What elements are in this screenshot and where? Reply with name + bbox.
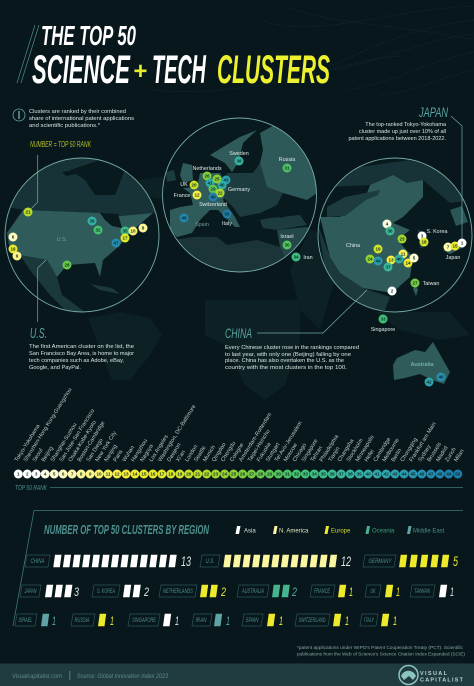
rotated cluster names: Stuttgart [265,442,282,463]
rotated cluster names: Seoul [32,448,44,463]
rotated cluster names: Fukuoka [256,441,273,463]
row 2: Japan to Taiwan: 1 [349,585,353,599]
row 1: China, U.S., Germany [25,553,458,569]
rank strip 1 to 50: 45 [410,472,416,477]
row 2: Japan to Taiwan: NETHERLANDS [163,589,193,595]
markers: north america: 17 [122,236,128,241]
row 3: Israel to Italy [15,614,397,628]
row 2: Japan to Taiwan [20,585,454,599]
markers and labels: europe: France [174,193,190,199]
callout: Japan: The top-ranked Tokyo-Yokohama [365,122,447,128]
markers and labels: europe: 41 [207,181,213,186]
markers and labels: east asia: Taiwan [423,281,439,287]
callout: China: Every Chinese cluster rose in the rankings compared [225,345,359,351]
rotated cluster names: Philadelphia [319,433,341,463]
rotated cluster names: Boston-Cambridge [77,420,107,463]
markers and labels: east asia: 14 [405,261,411,266]
rotated cluster names: Nagoya [140,443,155,463]
markers: north america: 32 [95,228,101,233]
rotated cluster names: Hangzhou [131,438,149,463]
row 1: China, U.S., Germany: CHINA [30,559,44,565]
rotated cluster names: Stockholm [346,437,365,463]
rank strip 1 to 50: 7 [71,472,74,477]
markers and labels: east asia: China [346,243,360,249]
rank strip 1 to 50: 36 [330,472,335,477]
rotated cluster names: Minneapolis [355,434,376,463]
rank strip 1 to 50: 4 [44,472,47,477]
markers and labels: east asia: S. Korea [427,229,447,235]
markers and labels: east asia: 19 [375,247,381,252]
row 3: Israel to Italy: ITALY [364,618,375,624]
legend: regions: Asia [244,528,256,534]
rotated cluster names: Berlin [391,448,403,463]
rotated cluster names: San Jose-San Francisco [59,408,96,463]
intro note with info icon: share of international patent applications [29,116,134,122]
globe: north america [4,158,160,312]
rank strip 1 to 50: 26 [240,472,246,477]
markers and labels: europe: UK [180,182,188,188]
row 2: Japan to Taiwan: FRANCE [314,589,331,595]
intro note with info icon: Clusters are ranked by their combined [29,109,126,115]
faint surrounding continents [88,176,470,400]
row 2: Japan to Taiwan: 2 [143,585,149,599]
callout: Japan [348,104,449,142]
markers and labels: europe: 50 [224,212,230,217]
markers and labels: europe: 25 [214,177,220,182]
rank strip 1 to 50: 47 [428,472,434,477]
rotated cluster names: Tianjin [328,446,342,463]
markers and labels: europe: 30 [284,243,290,248]
footnote: *patent applications under WIPO's Patent Cooperation Treaty (PCT). Scientific [297,645,464,650]
markers and labels: east asia: 18 [421,240,427,245]
row 3: Israel to Italy: 1 [279,614,283,628]
callout: China: CHINA [225,325,252,341]
rank strip 1 to 50: 43 [392,472,398,477]
rotated cluster names: Melbourne [382,437,401,463]
row 3: Israel to Italy: 1 [110,614,114,628]
logo: Visual Capitalist: CAPITALIST [420,678,464,684]
footnote [297,645,466,656]
markers and labels: east asia: Australia [410,362,435,368]
axis label: top 50 rank: TOP 50 RANK [15,483,48,492]
markers and labels: europe: 34 [293,255,299,260]
legend: regions: Middle East [413,528,445,534]
callout: Japan: patent applications between 2018-2022. [348,136,446,142]
rotated cluster names: Tehran [310,445,324,463]
callout: U.S.: Google, and PayPal. [29,365,81,371]
markers and labels: europe: 40 [219,183,225,188]
row 3: Israel to Italy: ISRAEL [18,618,32,624]
rank strip 1 to 50: 15 [141,472,147,477]
markers and labels: europe: Germany [228,187,250,193]
row 3: Israel to Italy: RUSSIA [74,618,90,624]
footer band: Source: Global Innovation Index 2023 [77,674,169,680]
markers and labels: europe: 49 [210,195,216,200]
markers and labels: east asia: 13 [388,258,394,263]
markers and labels: east asia: 36 [387,229,393,234]
rank strip 1 to 50: 50 [455,472,461,477]
rotated cluster names: Milan [453,449,466,463]
row 3: Israel to Italy: SINGAPORE [132,618,157,624]
rank strip 1 to 50: 23 [213,472,219,477]
markers and labels: east asia: 37 [385,265,391,270]
rotated cluster names: Cologne [229,442,245,463]
rank strip 1 to 50: 32 [294,472,299,477]
rank strip 1 to 50: 19 [177,472,183,477]
rank strip 1 to 50: 29 [267,472,272,477]
markers and labels: east asia: 24 [367,257,373,262]
rotated cluster names: Los Angeles [149,434,170,463]
rotated cluster names: Zurich [444,447,458,463]
rotated cluster names: Wuhan [122,445,136,463]
label: U.S. on map: U.S. [57,237,68,243]
markers and labels: east asia: 11 [401,252,406,257]
legend: regions: N. America [279,528,309,534]
callout: U.S.: U.S. [30,325,47,342]
row 1: China, U.S., Germany: GERMANY [368,559,392,565]
markers and labels: europe: Switzerland [199,202,227,208]
markers: north america: 35 [122,229,128,234]
markers and labels: europe: 20 [191,183,197,188]
row 3: Israel to Italy: 1 [226,614,230,628]
rotated cluster names: Beijing [41,446,55,463]
rotated cluster names: Tokyo-Yokohama [14,423,42,463]
row 2: Japan to Taiwan: UK [370,589,376,595]
markers and labels: europe: 31 [284,166,290,171]
markers and labels: east asia: 15 [452,244,458,249]
rotated cluster names: Tel Aviv-Jerusalem [274,420,304,463]
rank strip 1 to 50: 42 [384,472,389,477]
rotated cluster names: Shanghai-Suzhou [50,422,78,463]
markers and labels: east asia: 42 [426,380,432,385]
rotated cluster names: Paris [113,449,125,463]
title: + [133,58,147,85]
markers: north america: 16 [10,247,16,252]
footer band [0,664,474,686]
callout: China: country with the most clusters in the top 100. [225,365,348,371]
callout: China: to last year, with only one (Beijing) falling by one [225,352,351,358]
callout: U.S. [29,325,134,371]
rotated cluster names: London [184,444,199,463]
row 1: China, U.S., Germany: 5 [453,553,458,569]
row 3: Israel to Italy: 1 [175,614,179,628]
callout: U.S.: San Francisco Bay Area, is home to major [29,351,134,357]
rank strip 1 to 50: 39 [357,472,362,477]
markers and labels: east asia: 40 [396,257,402,262]
rank strip 1 to 50: 24 [222,472,228,477]
rotated cluster names: Seattle [193,445,208,463]
rotated cluster names: Sydney [418,444,433,463]
row 3: Israel to Italy: SWITZERLAND [298,618,326,624]
markers and labels: europe: 22 [217,191,223,196]
markers and labels: europe: 43 [223,178,229,183]
rotated cluster names: Madrid [436,445,450,463]
row 3: Israel to Italy: 1 [52,614,56,628]
title: TECH [152,48,207,92]
globe: east asia [318,158,472,312]
row 2: Japan to Taiwan: 2 [291,585,297,599]
row 3: Israel to Italy: 1 [393,614,397,628]
row 2: Japan to Taiwan: AUSTRALIA [241,589,264,595]
markers: north america [8,208,148,270]
footer band: Visualcapitalist.com [12,674,62,680]
australia land [393,342,450,384]
markers: north america: 10 [130,229,136,234]
legend: regions: Europe [331,528,351,534]
markers and labels: east asia: 46 [438,375,444,380]
footnote: publications from the Web of Science's Science Citation Index Expanded (SCIE) [297,652,466,656]
logo: Visual Capitalist: VISUAL [420,671,448,677]
rank strip 1 to 50: 33 [303,472,308,477]
rotated cluster names: Changsha [337,437,356,463]
markers and labels: europe: Spain [195,222,209,228]
rank strip 1 to 50: 8 [80,472,83,477]
markers: north america: 8 [142,226,145,231]
rotated cluster names: Brussels [427,442,443,463]
row 2: Japan to Taiwan: JAPAN [24,589,37,595]
title: THE TOP 50 [41,20,136,51]
title [17,20,330,92]
markers: north america: 6 [12,235,15,240]
markers and labels: europe: 12 [194,193,200,198]
markers and labels: europe: 38 [236,159,242,164]
callout: China: place. China has also overtaken the U.S. as the [225,358,344,364]
title: SCIENCE [32,48,131,92]
title: CLUSTERS [217,48,330,92]
markers and labels: east asia: 23 [399,237,405,242]
rotated cluster names: New York City [95,430,118,463]
rotated cluster names: San Diego [86,438,105,463]
row 3: Israel to Italy: IRAN [196,618,207,624]
row 3: Israel to Italy: 1 [345,614,349,628]
rotated cluster names: Chongqing [400,437,419,463]
markers and labels: europe: Israel [280,234,294,240]
rotated cluster names: Cambridge [373,437,392,463]
row 2: Japan to Taiwan: 3 [74,585,79,599]
markers: north america: 39 [89,219,95,224]
callout leader lines [28,116,462,333]
legend: number equals rank: NUMBER = TOP 50 RANK [30,140,91,149]
row 1: China, U.S., Germany: 13 [181,553,191,569]
rank strip 1 to 50: 2 [26,472,29,477]
rank strip 1 to 50: 21 [195,472,201,477]
row 2: Japan to Taiwan: 2 [220,585,226,599]
rank strip 1 to 50: 16 [150,472,156,477]
rank strip 1 to 50: 18 [168,472,174,477]
rotated cluster names: Chengdu [220,441,237,463]
rank strip 1 to 50: 9 [89,472,92,477]
rotated cluster names: Washington, DC-Baltimore [157,404,197,463]
rank strip 1 to 50: 20 [186,472,192,477]
markers and labels: europe: 26 [204,174,210,179]
rotated cluster names: Xi'an [175,449,187,463]
rank strip 1 to 50: 27 [249,472,254,477]
rotated cluster names [14,387,466,463]
rank strip 1 to 50: 11 [106,472,111,477]
panel: clusters by region [13,510,463,628]
markers and labels: europe: Sweden [229,151,249,157]
rank strip 1 to 50: 12 [114,472,120,477]
rank strip 1 to 50: 6 [62,472,65,477]
markers and labels: east asia: 44 [375,259,381,264]
rotated cluster names: Singapore [301,438,320,463]
rotated cluster names: Osaka-Kobe-Kyoto [68,420,98,463]
rank strip 1 to 50: 48 [437,472,443,477]
rank strip 1 to 50: 25 [231,472,237,477]
callout: China [225,325,359,371]
row 2: Japan to Taiwan: S. KOREA [97,589,115,595]
rank strip 1 to 50: 13 [123,472,129,477]
rank strip 1 to 50: 3 [35,472,38,477]
globe: europe [162,118,317,273]
rank strip 1 to 50: 30 [276,472,281,477]
markers and labels: europe: 48 [181,216,187,221]
markers and labels: europe: Iran [303,255,313,261]
markers and labels: east asia: 7 [447,245,450,250]
markers and labels: europe [174,151,313,262]
rank strip 1 to 50: 40 [366,472,371,477]
row 2: Japan to Taiwan: 1 [396,585,400,599]
panel heading: NUMBER OF TOP 50 CLUSTERS BY REGION [44,522,209,537]
rotated cluster names: Hefei [364,449,376,463]
rotated cluster names: Moscow [283,442,299,463]
rotated cluster names: Amsterdam-Rotterdam [238,412,273,463]
callout: U.S.: The first American cluster on the list, the [29,344,134,350]
legend: regions: Oceania [372,528,395,534]
rotated cluster names: Nanjing [104,444,119,463]
markers: north america: 9 [16,254,19,259]
intro note with info icon [13,109,134,129]
markers and labels: east asia: 4 [386,222,389,227]
markers and labels: europe: Russia [279,157,295,163]
rotated cluster names: Daejeon [166,442,183,463]
rank strip 1 to 50: 37 [339,472,344,477]
markers and labels: east asia: 33 [380,317,386,322]
markers and labels: europe: 29 [210,187,216,192]
rank strip 1 to 50: 49 [446,472,452,477]
markers: north america: 47 [113,241,119,246]
markers and labels: east asia: 2 [391,289,394,294]
row 2: Japan to Taiwan: 1 [450,585,454,599]
logo: Visual Capitalist [399,666,464,684]
callout: Japan: cluster made up just over 10% of all [359,129,446,135]
rank strip 1 to 50: 14 [132,472,138,477]
rank strip 1 to 50: 5 [53,472,56,477]
markers and labels: east asia: 27 [412,281,418,286]
rotated cluster names: Chicago [292,442,308,463]
markers and labels: east asia: 5 [413,256,416,261]
rank strip 1 to 50: 1 [17,472,20,477]
rotated cluster names: Taipei-Hsinchu [247,429,272,463]
row 3: Israel to Italy: SPAIN [246,618,259,624]
rank strip 1 to 50 [14,470,462,478]
markers and labels: east asia: Singapore [371,327,395,333]
row 1: China, U.S., Germany: 12 [341,553,351,569]
rotated cluster names: Frankfurt am Main [409,421,438,463]
rotated cluster names: Munich [202,445,217,463]
markers and labels: east asia: Japan [446,255,460,261]
rank strip 1 to 50: 31 [285,472,290,477]
markers and labels: europe: Italy [222,221,232,227]
rotated cluster names: Shenzhen-Hong Kong-Guangzhou [23,387,73,463]
row 2: Japan to Taiwan: TAIWAN [414,589,430,595]
callout: U.S.: tech companies such as Adobe, eBay, [29,358,124,364]
markers and labels: east asia: 1 [461,241,464,246]
callout: Japan: JAPAN [418,104,449,120]
markers and labels: east asia: 3 [421,234,424,239]
rank strip 1 to 50: 41 [375,472,380,477]
markers: north america: 21 [25,210,31,215]
intro note with info icon: and scientific publications.* [29,123,101,129]
rank strip 1 to 50: 34 [312,472,317,477]
rank strip 1 to 50: 38 [348,472,353,477]
rank strip 1 to 50: 35 [321,472,326,477]
markers and labels: europe: Netherlands [192,166,222,172]
rank strip 1 to 50: 28 [258,472,263,477]
row 1: China, U.S., Germany: U.S. [206,559,214,565]
legend: regions [236,526,445,534]
rank strip 1 to 50: 17 [159,472,165,477]
rank strip 1 to 50: 46 [419,472,425,477]
rank strip 1 to 50: 22 [204,472,210,477]
markers: north america: 28 [64,263,70,268]
rank strip 1 to 50: 10 [96,472,102,477]
rank strip 1 to 50: 44 [401,472,407,477]
markers and labels: east asia [346,220,466,386]
rotated cluster names: Qingdao [211,442,228,463]
